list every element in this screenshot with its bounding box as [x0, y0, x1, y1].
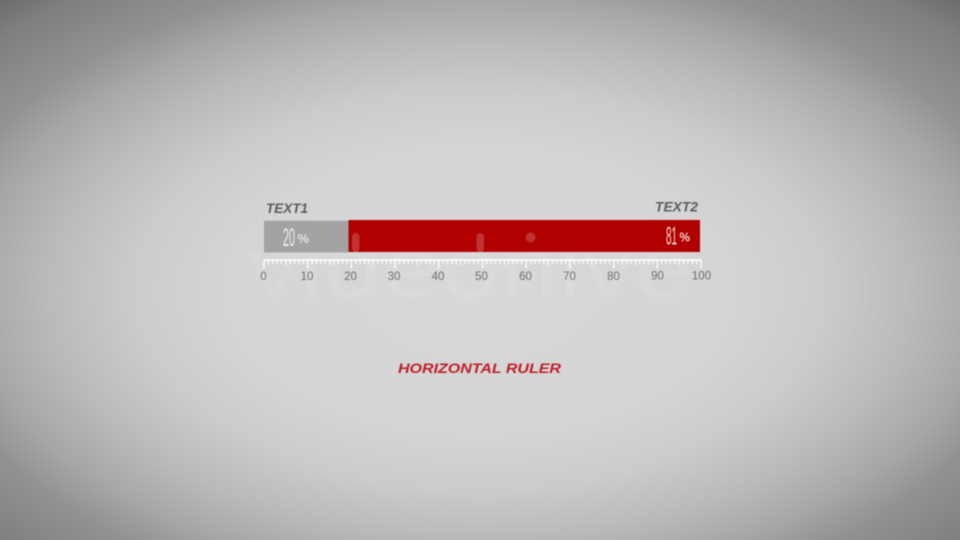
- ruler numbers: 100: [692, 270, 711, 282]
- ruler numbers: 20: [344, 271, 357, 283]
- watermark: videohive: [248, 221, 693, 316]
- watermark marks on bar: [352, 232, 536, 252]
- ruler numbers: 40: [432, 271, 444, 283]
- value: 81%: 81: [666, 222, 677, 250]
- value: 81%: %: [680, 230, 690, 244]
- value: 20%: 20: [283, 224, 295, 252]
- bar: red segment 81%: [348, 220, 700, 252]
- bar: grey segment 20%: [264, 221, 348, 252]
- ruler scale: [260, 260, 711, 283]
- ruler baseline and ticks: [264, 260, 702, 268]
- ruler numbers: 80: [607, 271, 620, 283]
- ruler numbers: 0: [260, 271, 267, 283]
- value: 20%: %: [298, 231, 309, 246]
- label: TEXT1: TEXT1: [266, 200, 308, 216]
- ruler numbers: 50: [475, 271, 488, 283]
- ruler numbers: 10: [301, 271, 313, 283]
- ruler numbers: 30: [388, 271, 400, 283]
- ruler numbers: [260, 270, 711, 283]
- caption: HORIZONTAL RULER: HORIZONTAL RULER: [398, 361, 561, 376]
- ruler numbers: 60: [519, 271, 532, 283]
- ruler numbers: 70: [563, 271, 576, 283]
- label: TEXT2: TEXT2: [655, 198, 698, 214]
- ruler numbers: 90: [651, 270, 664, 282]
